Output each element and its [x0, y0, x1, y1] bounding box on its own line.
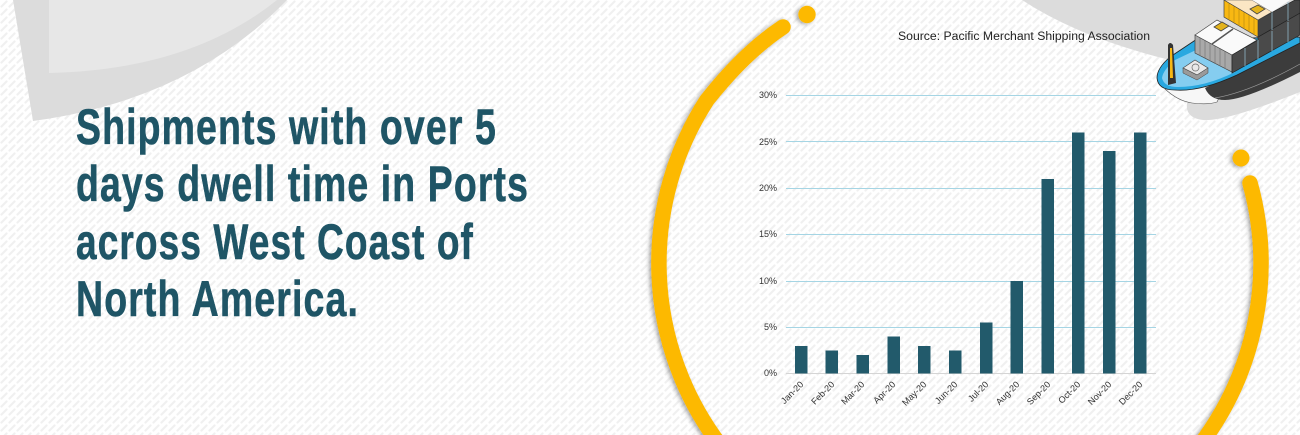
x axis labels: [779, 379, 1144, 408]
x axis labels: Aug-20: [994, 379, 1021, 407]
y axis labels: 5%: [764, 322, 777, 332]
x axis labels: May-20: [900, 379, 928, 408]
x axis labels: Feb-20: [809, 379, 836, 407]
title: days dwell time in Ports: [76, 156, 529, 212]
x axis labels: Jan-20: [779, 379, 805, 406]
source note: Source: Pacific Merchant Shipping Association: [898, 31, 1150, 43]
bar chart: [759, 90, 1156, 408]
x axis labels: Jul-20: [966, 379, 990, 404]
y axis labels: 20%: [759, 183, 777, 193]
x axis labels: Mar-20: [839, 379, 866, 407]
x axis labels: Jun-20: [933, 379, 959, 406]
chart gridlines: [786, 96, 1156, 374]
y axis labels: 30%: [759, 90, 777, 100]
y axis labels: 15%: [759, 229, 777, 239]
x axis labels: Dec-20: [1117, 379, 1144, 407]
title: [76, 99, 529, 327]
x axis labels: Apr-20: [871, 379, 897, 406]
title: North America.: [76, 271, 359, 327]
x axis labels: Sep-20: [1025, 379, 1052, 407]
decorative shape: top-left grey arc: [13, 0, 287, 121]
icon: container ship: [1157, 0, 1300, 120]
x axis labels: Nov-20: [1086, 379, 1113, 407]
x axis labels: Oct-20: [1056, 379, 1082, 406]
y axis labels: 0%: [764, 368, 777, 378]
bars: [795, 132, 1146, 374]
title: Shipments with over 5: [76, 99, 497, 155]
yellow ring frame: [659, 6, 1261, 435]
decorative shape: top-right grey arc: [1022, 0, 1300, 60]
y axis labels: 10%: [759, 276, 777, 286]
y axis labels: [759, 90, 777, 378]
title: across West Coast of: [76, 214, 474, 270]
y axis labels: 25%: [759, 137, 777, 147]
